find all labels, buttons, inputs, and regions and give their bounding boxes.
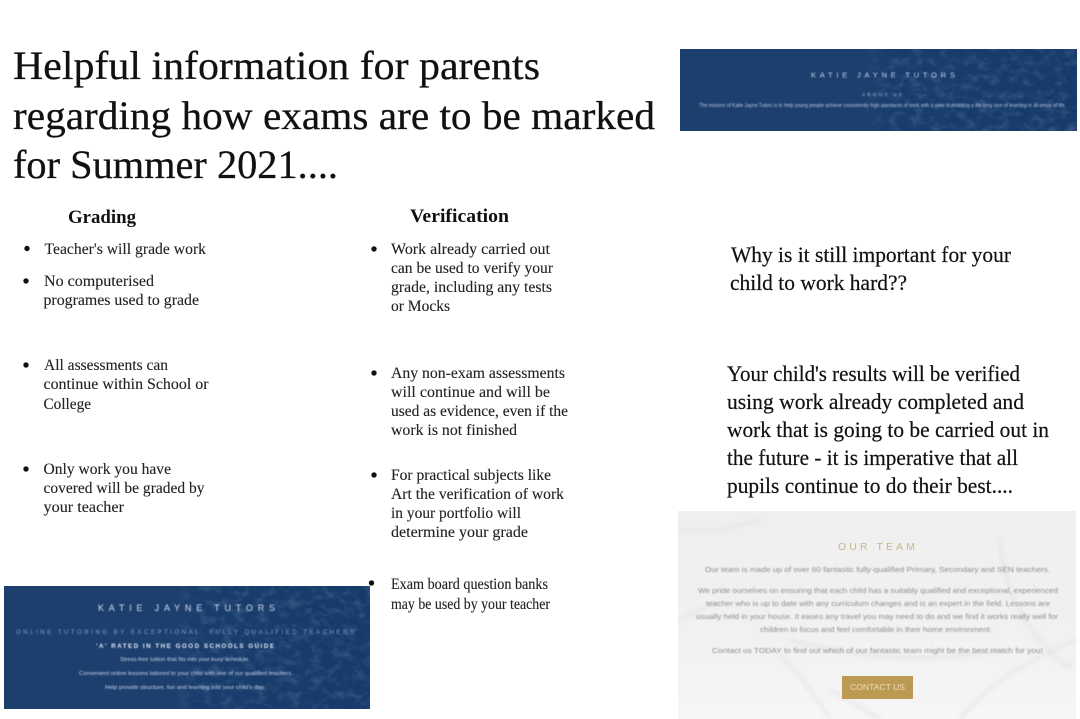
banner: online tutoring: Convenient online lessons tailored to your child with one of our qualified teachers. [79, 671, 294, 677]
bullet list: verification [369, 241, 568, 613]
bullet list: grading: All assessments can [44, 357, 168, 374]
team description: Contact us TODAY to find out which of our fantastic team might be the best match for you! [712, 646, 1043, 655]
team description: teacher who is up to date with any curriculum changes and is an expert in the field. Lessons are [706, 599, 1050, 608]
answer text block [727, 361, 1049, 498]
answer text block: Your child's results will be verified [727, 361, 1020, 386]
answer text block: pupils continue to do their best.... [727, 473, 1013, 498]
banner: online tutoring [4, 586, 370, 709]
bullet list: grading: programes used to grade [44, 292, 199, 309]
banner: about us: ABOUT US [862, 92, 902, 98]
heading: grading: Grading [68, 208, 137, 228]
bullet list: grading: Only work you have [44, 461, 171, 478]
banner: about us: KATIE JAYNE TUTORS [811, 70, 955, 80]
banner: online tutoring: ONLINE TUTORING BY EXCEPTIONAL, FULLY QUALIFIED TEACHERS [16, 629, 354, 636]
bullet list: grading: College [44, 396, 91, 413]
button: contact us [842, 676, 913, 699]
team description: Our team is made up of over 60 fantastic fully-qualified Primary, Secondary and SEN teachers. [705, 565, 1050, 574]
bullet list: verification: determine your grade [391, 524, 528, 541]
panel: our team [678, 511, 1076, 719]
bullet list: verification: may be used by your teacher [391, 596, 551, 613]
bullet list: verification: in your portfolio will [391, 505, 521, 522]
team description [696, 565, 1059, 655]
panel: verification [369, 207, 568, 613]
bullet list: grading: Teacher's will grade work [44, 241, 206, 258]
bullet list: verification: Work already carried out [391, 241, 551, 258]
bullet list: verification: work is not finished [391, 422, 517, 439]
bullet list: grading: continue within School or [44, 376, 209, 393]
banner: online tutoring: Help provide structure, fun and learning into your child's day. [105, 685, 266, 691]
banner: about us: The mission of Katie Jayne Tutors is to help young people achieve consistently high standards of work with a view to enabling a life-long love of learning in all areas of life. [699, 103, 1066, 109]
banner: online tutoring: 'A' RATED IN THE GOOD SCHOOLS GUIDE [96, 643, 274, 650]
bullet list: verification: or Mocks [391, 298, 450, 315]
bullet list: verification: can be used to verify your [391, 260, 554, 277]
answer text block: work that is going to be carried out in [727, 417, 1049, 442]
title: Helpful information for parents [13, 43, 540, 88]
bullet list: grading [23, 241, 209, 516]
banner: online tutoring: Stress-free tuition that fits into your busy schedule. [120, 657, 250, 663]
bullet list: verification: Exam board question banks [391, 576, 548, 593]
team description: usually held in your house. It eases any travel you may need to do and we find it works really well for [696, 612, 1059, 621]
bullet list: verification: Art the verification of work [391, 486, 564, 503]
bullet list: grading: No computerised [44, 273, 154, 290]
heading: verification: Verification [410, 207, 510, 227]
banner: online tutoring: KATIE JAYNE TUTORS [98, 603, 275, 613]
banner: about us [680, 49, 1077, 131]
heading: our team: OUR TEAM [838, 541, 915, 553]
question heading [730, 242, 1012, 295]
team description: We pride ourselves on ensuring that each child has a suitably qualified and exceptional, experienced [698, 586, 1058, 595]
bullet list: verification: will continue and will be [391, 384, 550, 401]
answer text block: using work already completed and [727, 389, 1024, 414]
panel: grading [23, 208, 209, 516]
bullet list: verification: used as evidence, even if the [391, 403, 568, 420]
question heading: child to work hard?? [730, 270, 907, 295]
bullet list: grading: your teacher [44, 499, 125, 516]
title [13, 43, 655, 187]
bullet list: verification: Any non-exam assessments [391, 365, 565, 382]
team description: children to focus and feel comfortable in their home environment. [760, 625, 992, 634]
bullet list: verification: For practical subjects like [391, 467, 551, 484]
button: contact us: CONTACT US [850, 683, 905, 692]
answer text block: the future - it is imperative that all [727, 445, 1018, 470]
bullet list: verification: grade, including any tests [391, 279, 552, 296]
question heading: Why is it still important for your [731, 242, 1012, 267]
title: regarding how exams are to be marked [13, 93, 655, 138]
title: for Summer 2021.... [13, 142, 338, 187]
bullet list: grading: covered will be graded by [44, 480, 205, 497]
